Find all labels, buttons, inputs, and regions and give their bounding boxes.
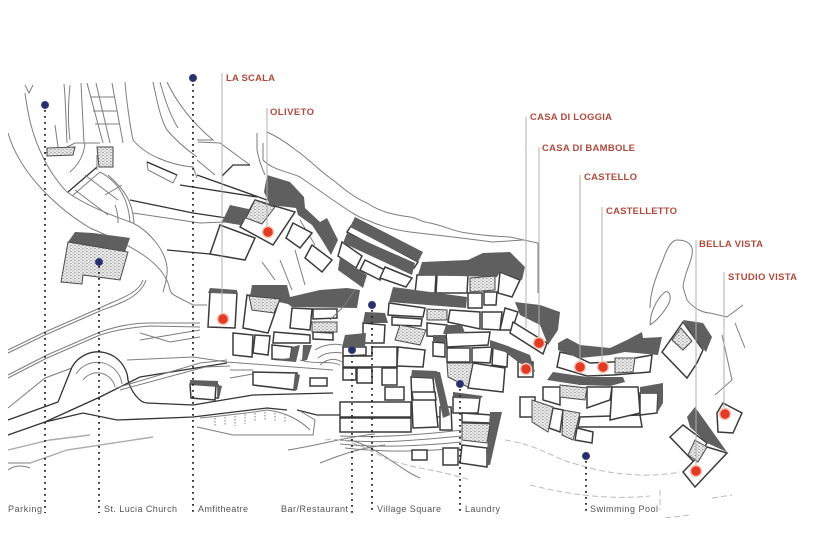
service labels: Parking [8,504,42,514]
accommodation labels: CASTELLETTO [606,206,677,217]
accommodation labels: LA SCALA [226,73,275,84]
service labels: Laundry [465,504,500,514]
accommodation labels: OLIVETO [270,107,314,118]
service labels: St. Lucia Church [104,504,177,514]
dark roofs [68,175,727,465]
site map [8,82,745,518]
service markers [41,74,590,460]
accommodation labels: STUDIO VISTA [728,272,797,283]
white building cells [190,200,742,487]
accommodation markers [218,226,730,476]
textured roofs [47,147,707,462]
service labels: Village Square [377,504,441,514]
service labels: Swimming Pool [590,504,658,514]
accommodation labels: CASA DI BAMBOLE [542,143,635,154]
service labels [8,504,658,514]
accommodation labels: CASTELLO [584,172,637,183]
terrain and road lines [8,82,745,518]
service labels: Bar/Restaurant [281,504,348,514]
accommodation labels: BELLA VISTA [699,239,763,250]
service labels: Amfitheatre [198,504,248,514]
accommodation labels: CASA DI LOGGIA [530,112,612,123]
service dotted lines [45,84,586,513]
amphitheatre detail [330,290,355,320]
location leader lines [222,73,724,468]
accommodation labels [226,73,797,283]
